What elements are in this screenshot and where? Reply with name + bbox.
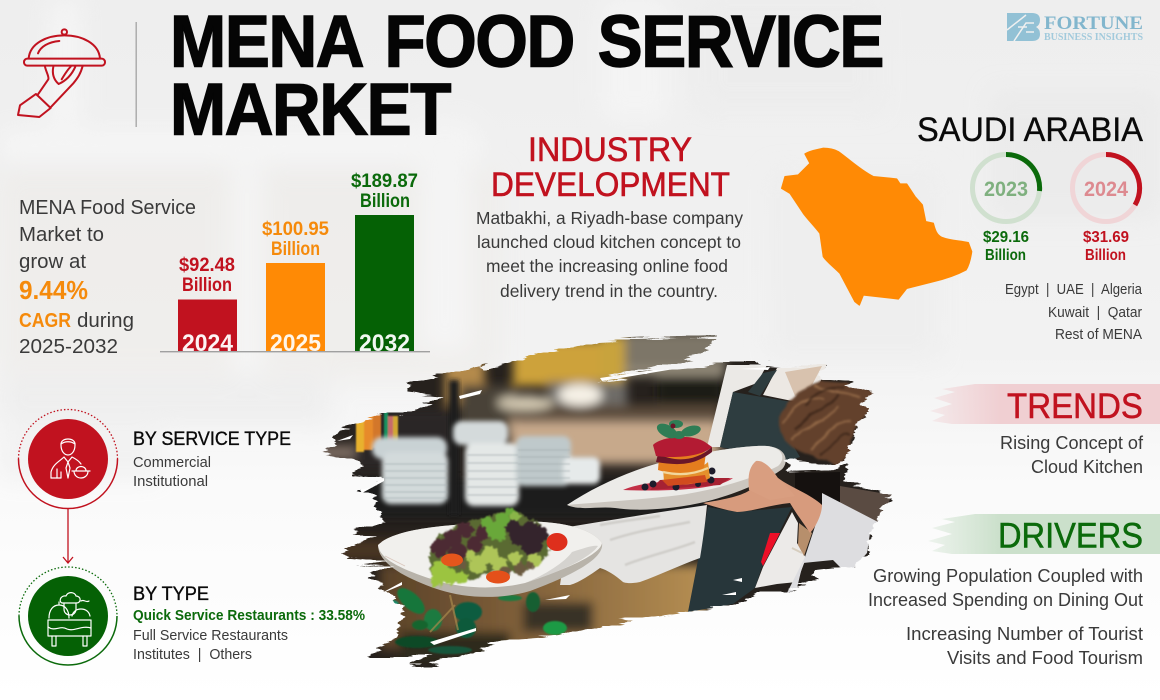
icon: cloche on hand <box>18 29 105 117</box>
text block: by type <box>133 583 365 663</box>
heading: Saudi Arabia: SAUDI ARABIA <box>917 111 1143 149</box>
text block: other countries: Egypt | UAE | Algeria <box>1005 282 1143 298</box>
text block: CAGR statement: 2025-2032 <box>19 336 118 358</box>
title: MENA FOOD SERVICE <box>170 2 883 82</box>
text block: CAGR statement: during <box>77 310 134 332</box>
text block: drivers: Increased Spending on Dining Out <box>868 590 1143 610</box>
title: MARKET <box>170 70 451 150</box>
text block: CAGR statement: grow at <box>19 251 86 273</box>
icon: service type circle with waiter <box>18 410 118 508</box>
text block: by type: BY TYPE <box>133 583 209 605</box>
bar 2032: 2032 <box>359 330 410 357</box>
text block: industry development description: Matbakhi, a Riyadh-base company <box>476 208 743 228</box>
donut: 2024 <box>1072 154 1140 264</box>
text block: drivers: Growing Population Coupled with <box>873 566 1143 586</box>
blurred kitchen background <box>310 332 725 662</box>
bar 2032 <box>351 171 418 357</box>
text block: by service type: BY SERVICE TYPE <box>133 428 291 450</box>
hand under dessert plate <box>703 478 822 533</box>
bar 2024 <box>178 255 237 357</box>
bar 2025: $100.95 <box>262 219 329 240</box>
text block: CAGR statement <box>19 197 196 358</box>
text block: drivers <box>868 566 1143 668</box>
donut: 2024: $31.69 <box>1083 229 1129 246</box>
text block: other countries: Kuwait | Qatar <box>1048 305 1142 321</box>
text block: by service type <box>133 428 291 490</box>
text block: by type: Quick Service Restaurants : 33.58% <box>133 608 365 624</box>
text block: CAGR statement: MENA Food Service <box>19 197 196 219</box>
text block: trends: Rising Concept of <box>1000 433 1144 453</box>
text block: CAGR statement: Market to <box>19 224 104 246</box>
banner: drivers <box>928 514 1160 556</box>
donut: 2023 <box>972 154 1040 264</box>
text block: by service type: Commercial <box>133 455 211 471</box>
text block: by type: Full Service Restaurants <box>133 628 288 644</box>
text block: other countries: Rest of MENA <box>1055 327 1142 343</box>
waitress back: shirt, apron and strap <box>707 363 827 461</box>
text block: industry development description <box>476 208 743 301</box>
donut: 2024: Billion <box>1085 247 1126 264</box>
white brush scratches <box>337 366 770 645</box>
hair <box>780 381 875 467</box>
donut: 2023: 2023 <box>984 178 1028 201</box>
text block: by type: Institutes | Others <box>133 647 252 663</box>
bar 2025 <box>262 219 329 357</box>
bar 2024: 2024 <box>182 330 234 357</box>
map: Saudi Arabia <box>782 148 972 305</box>
bar 2032: Billion <box>360 191 410 212</box>
inner right sleeve <box>755 512 806 588</box>
text block: trends: Cloud Kitchen <box>1031 457 1143 477</box>
text block: trends <box>1000 433 1144 477</box>
text block: industry development description: meet the increasing online food <box>486 256 728 276</box>
text block: drivers: Increasing Number of Tourist <box>906 624 1143 644</box>
dessert plate <box>567 420 795 510</box>
divider <box>136 22 137 127</box>
arrow <box>63 508 73 563</box>
text block: industry development description: launched cloud kitchen concept to <box>477 232 741 252</box>
dark vertical post <box>449 380 459 515</box>
heading: industry development: DEVELOPMENT <box>491 166 730 204</box>
tomatoes <box>441 533 568 584</box>
plate stacks <box>372 421 600 506</box>
salad plate <box>378 522 602 597</box>
banner: drivers: DRIVERS <box>998 516 1143 556</box>
orange and green stripes <box>356 412 398 452</box>
banner: trends: TRENDS <box>1007 387 1143 426</box>
title <box>170 2 883 150</box>
bar 2032: $189.87 <box>351 171 418 192</box>
icon: type circle with chef <box>19 567 117 665</box>
lower apron <box>688 507 792 612</box>
logo: Fortune Business Insights: FORTUNE <box>1044 13 1143 34</box>
bar 2024: Billion <box>182 275 232 296</box>
donut: 2024: 2024 <box>1084 178 1128 201</box>
bar 2025: Billion <box>271 239 320 260</box>
logo: Fortune Business Insights: BUSINESS INSIGHTS <box>1044 32 1143 43</box>
bar chart: market size <box>160 171 430 357</box>
bar 2024: $92.48 <box>179 255 235 276</box>
donut: 2023: $29.16 <box>983 229 1029 246</box>
plants <box>387 584 567 654</box>
text block: industry development description: delivery trend in the country. <box>500 281 718 301</box>
text block: drivers: Visits and Food Tourism <box>947 648 1143 668</box>
bar 2025: 2025 <box>270 330 321 357</box>
heading: industry development <box>491 131 730 204</box>
text block: CAGR statement: 9.44% <box>19 275 88 305</box>
photo: waitress carrying plates in brush-stroke frame <box>322 335 893 668</box>
dark area and sleeve behind arm <box>795 472 840 505</box>
text block: by service type: Institutional <box>133 474 208 490</box>
near sleeve and arm holding salad plate <box>560 505 707 585</box>
text block: CAGR statement: CAGR <box>19 310 71 332</box>
outer right sleeve <box>787 493 880 593</box>
text block: other countries <box>1005 282 1143 343</box>
heading: industry development: INDUSTRY <box>528 131 692 169</box>
donut: 2023: Billion <box>985 247 1026 264</box>
banner: trends <box>930 384 1160 426</box>
logo: Fortune Business Insights <box>1007 13 1143 43</box>
salad <box>430 507 550 587</box>
